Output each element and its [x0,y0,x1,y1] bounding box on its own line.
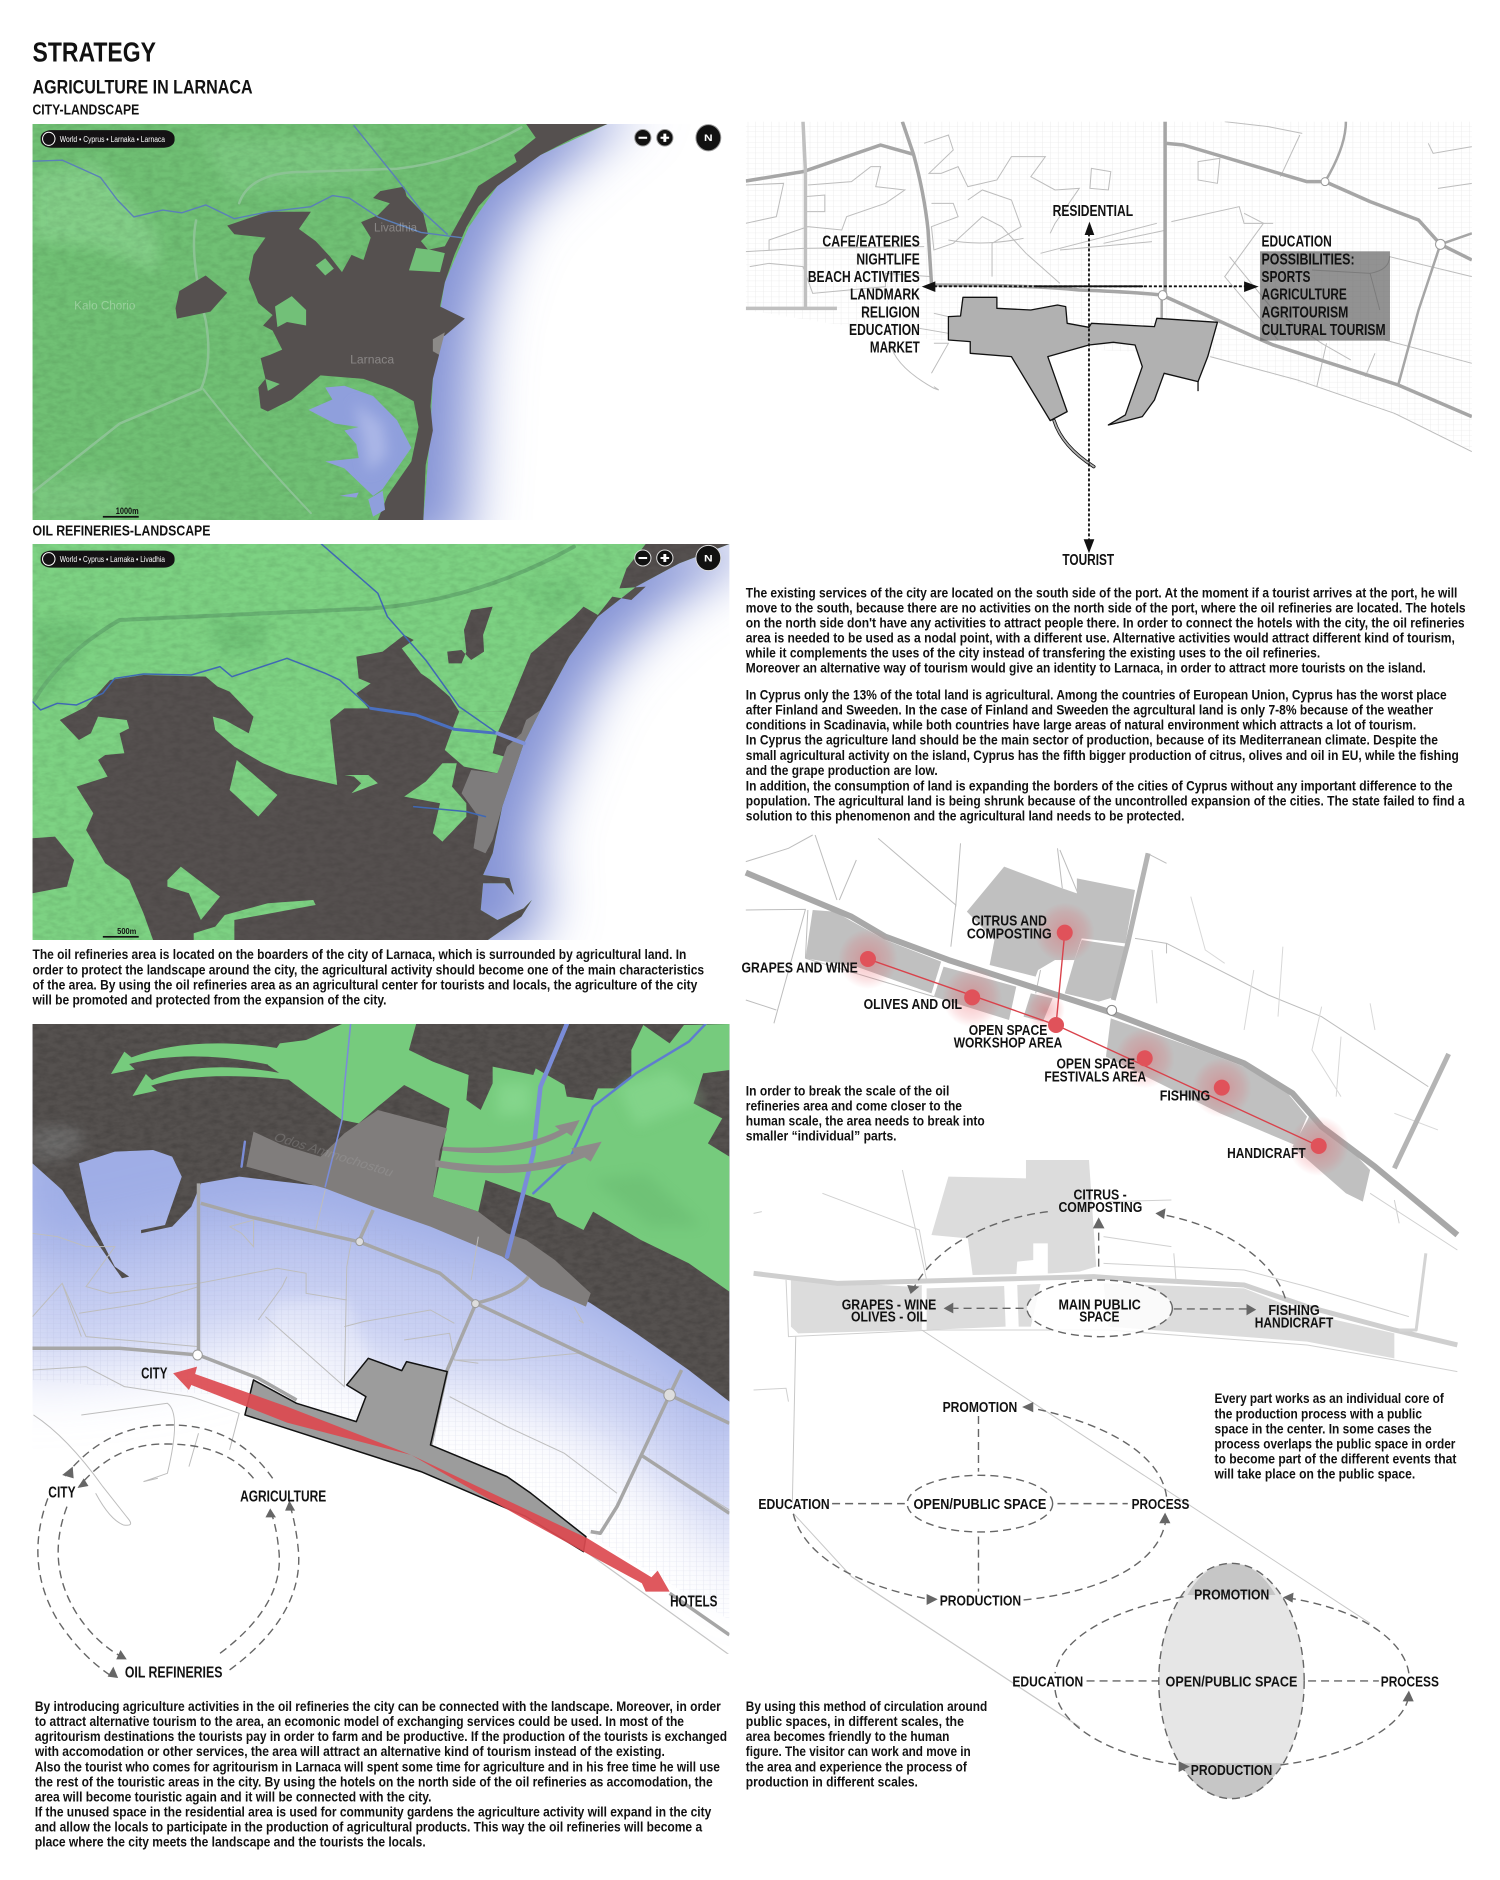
labels: north side possibilities [1262,234,1386,339]
red nodes [860,925,1327,1154]
map: services around the port [746,122,1472,569]
map: refinery connections with city and hotels [0,1020,765,1655]
arrows: green expansion [111,1043,292,1096]
refinery plot outlined [245,1358,586,1552]
site labels: OLIVES - OIL [851,1308,927,1325]
paragraph: oil refineries: order to protect the landscape around the city, the agricultural activity should become one of the main characteristics [33,962,704,978]
ellipse: main public space [1027,1280,1172,1337]
site labels: SPACE [1079,1308,1120,1325]
map breadcrumb [41,551,175,568]
label: tourist: TOURIST [1062,552,1114,569]
node labels [741,912,1306,1161]
labels: PRODUCTION [1191,1761,1272,1778]
site labels [842,1186,1333,1331]
compass [696,125,721,151]
site labels: CITRUS - [1073,1186,1127,1203]
labels: south side services: EDUCATION [849,322,920,339]
subtitle: AGRICULTURE IN LARNACA [33,76,253,98]
labels: south side services [808,234,920,357]
map zoom buttons [635,550,673,566]
text: break the scale: In order to break the scale of the oil [746,1083,949,1099]
node labels: COMPOSTING [967,925,1052,942]
paragraph: agritourism: area will become touristic again and it will be connected with the city. [35,1789,431,1805]
text: method of circulation [746,1699,987,1790]
scale bar: 500m [117,927,136,936]
streets [33,1190,729,1525]
possibilities box [1260,251,1390,341]
title: STRATEGY [33,37,156,68]
text: method of circulation: public spaces, in different scales, the [746,1714,964,1729]
text: every part [1214,1391,1457,1482]
paragraph: agritourism: Also the tourist who comes for agritourism in Larnaca will spent some time for agriculture and in his free time he will use [35,1759,720,1775]
main roads [746,853,1457,1235]
map breadcrumb: World • Cyprus • Larnaka • Livadhia [60,556,165,564]
paragraph: agritourism: to attract alternative tourism to the area, an ecomonic model of exchanging services could be used. In most of the [35,1714,684,1729]
circular diagram: city, agriculture, oil refineries: OIL REFINERIES [125,1665,222,1682]
paragraph: agritourism: agritourism destinations the tourists pay in order to farm and be productive. If the production of the tourists is exchanged [35,1729,727,1744]
circulation arcs [907,1208,1285,1315]
heading and paragraph below maps [32,523,704,1008]
labels: PROMOTION [1194,1586,1269,1603]
labels: south side services: CAFE/EATERIES [822,234,920,251]
arrow: north-south dashed [1084,222,1094,553]
labels: PROCESS [1381,1673,1439,1690]
map labels: city and hotels [141,1366,717,1611]
text: method of circulation: By using this method of circulation around [746,1699,987,1714]
paragraph: agritourism: If the unused space in the residential area is used for community gardens the agriculture activity will expand in the city [35,1805,712,1820]
paragraphs: services and agricultural land: solution to this phenomenon and the agricultural land needs to be protected. [746,808,1184,824]
circular diagram: city, agriculture, oil refineries [38,1425,326,1682]
arrow: east-west dashed [922,281,1259,292]
circulation arcs [1055,1593,1414,1772]
circulation diagram: small [758,1398,1189,1609]
node labels: WORKSHOP AREA [954,1034,1062,1051]
map labels: city and hotels: HOTELS [670,1594,717,1611]
site labels: GRAPES - WINE [842,1296,936,1313]
text: break the scale: human scale, the area needs to break into [746,1114,985,1129]
labels: north side possibilities: AGRICULTURE [1262,287,1347,304]
map: city landscape: Kalo Chorio [74,299,135,313]
glow circles [838,903,1349,1176]
node labels: OPEN SPACE [1057,1055,1135,1072]
roads and streets [754,1170,1457,1623]
text: method of circulation: production in different scales. [746,1774,918,1790]
map labels: city and hotels: CITY [141,1366,168,1383]
site labels: COMPOSTING [1058,1198,1142,1215]
main roads [746,122,1472,417]
node labels: GRAPES AND WINE [741,959,858,976]
paragraphs: services and agricultural land [745,585,1466,824]
scale bar [103,927,139,938]
node labels: CITRUS AND [972,912,1047,929]
compass: N [704,133,713,144]
site labels: FISHING [1268,1301,1320,1318]
labels: north side possibilities: POSSIBILITIES: [1262,251,1355,268]
node labels: FISHING [1160,1087,1210,1104]
label: residential: RESIDENTIAL [1053,203,1133,220]
heading: city-landscape: CITY-LANDSCAPE [33,101,139,118]
labels: north side possibilities: AGRITOURISM [1262,304,1348,321]
paragraph: agritourism [34,1699,727,1850]
labels: north side possibilities: CULTURAL TOURISM [1262,322,1386,339]
map breadcrumb [41,130,175,148]
paragraph: agritourism: and allow the locals to participate in the production of agricultural products. This way the oil refineries will become a [35,1820,703,1835]
labels: north side possibilities: SPORTS [1262,269,1311,286]
thin streets [746,122,1472,452]
map: oil refineries landscape [33,540,765,953]
circulation diagram: large [746,1563,1439,1799]
circulation diagram: small: PRODUCTION [940,1592,1021,1609]
text: break the scale: smaller “individual” parts. [746,1129,897,1144]
paragraph: agritourism: with accomodation or other services, the area will attract an alternative kind of tourism instead of the existing. [34,1744,665,1759]
labels [1012,1586,1439,1778]
map zoom buttons [635,129,673,146]
circulation diagram: small: PROMOTION [943,1398,1017,1415]
thin streets [746,835,1438,1145]
map: city landscape [32,124,722,520]
text: break the scale [746,1083,985,1144]
main roads [33,1183,729,1655]
paragraph: oil refineries [32,947,704,1008]
labels: south side services: NIGHTLIFE [856,251,920,268]
paragraph: agritourism: place where the city meets the landscape and the tourists the locals. [35,1835,426,1850]
refinery site gray [246,1110,591,1307]
labels: south side services: RELIGION [861,304,920,321]
circular diagram: city, agriculture, oil refineries: CITY [48,1484,76,1501]
diagram: circulation at site scale [754,1160,1457,1623]
compass: N [704,554,713,564]
labels: OPEN/PUBLIC SPACE [1166,1673,1297,1690]
paragraph: oil refineries: will be promoted and protected from the expansion of the city. [32,992,386,1008]
text: method of circulation: area becomes friendly to the human [746,1729,949,1744]
green agricultural land [268,1024,729,1292]
map: city landscape: Larnaca [350,353,395,367]
site blocks [791,1160,1394,1358]
labels: south side services: MARKET [870,340,920,357]
site labels: HANDICRAFT [1255,1314,1333,1331]
node labels: OLIVES AND OIL [864,995,962,1012]
paragraph: agritourism: By introducing agriculture activities in the oil refineries the city can be connected with the landscape. Moreover, in order [35,1699,721,1714]
text: method of circulation: figure. The visitor can work and move in [746,1744,971,1759]
header titles [33,37,253,118]
circulation diagram: small: EDUCATION [758,1495,830,1512]
labels: south side services: LANDMARK [850,287,920,304]
circulation diagram: small: OPEN/PUBLIC SPACE [914,1495,1046,1512]
arrow: city-hotels connection [173,1367,670,1592]
paragraph: agritourism: the rest of the touristic areas in the city. By using the hotels on the north side of the oil refineries as accomodation, the [35,1774,713,1790]
node labels: OPEN SPACE [969,1021,1047,1038]
site labels: MAIN PUBLIC [1058,1296,1141,1313]
labels: south side services: BEACH ACTIVITIES [808,269,920,286]
connecting red lines [868,933,1319,1146]
paragraph: oil refineries: The oil refineries area is located on the boarders of the city of Larnaca, which is surrounded by agricultural land. In [33,947,686,962]
node labels: HANDICRAFT [1227,1144,1306,1161]
arrows: gray expansion [435,1120,602,1173]
public space ellipse [1159,1563,1304,1799]
map: city landscape: Livadhia [374,221,418,235]
labels: EDUCATION [1012,1673,1083,1690]
text: method of circulation: the area and experience the process of [746,1759,967,1775]
oil refinery footprint [948,297,1217,467]
text: break the scale: refineries area and come closer to the [746,1099,962,1114]
map: refinery connections with city and hotels: Odos Ammochostou [271,1131,396,1180]
scale bar: 1000m [116,506,139,516]
circular diagram: city, agriculture, oil refineries: AGRICULTURE [240,1489,326,1506]
heading: oil refineries-landscape: OIL REFINERIES-LANDSCAPE [33,523,211,539]
production blocks [805,867,1370,1202]
node labels: FESTIVALS AREA [1044,1068,1146,1085]
labels: north side possibilities: EDUCATION [1262,234,1332,251]
compass [696,545,721,571]
map breadcrumb: World • Cyprus • Larnaka • Larnaca [60,135,165,144]
circulation diagram: small: PROCESS [1132,1495,1189,1512]
diagram: individual production parts [741,835,1457,1235]
paragraphs: services and agricultural land: and the grape production are low. [746,763,938,778]
paragraph: oil refineries: of the area. By using the oil refineries area as an agricultural center for tourists and locals, the agriculture of the city [33,977,698,993]
scale bar [103,506,139,518]
